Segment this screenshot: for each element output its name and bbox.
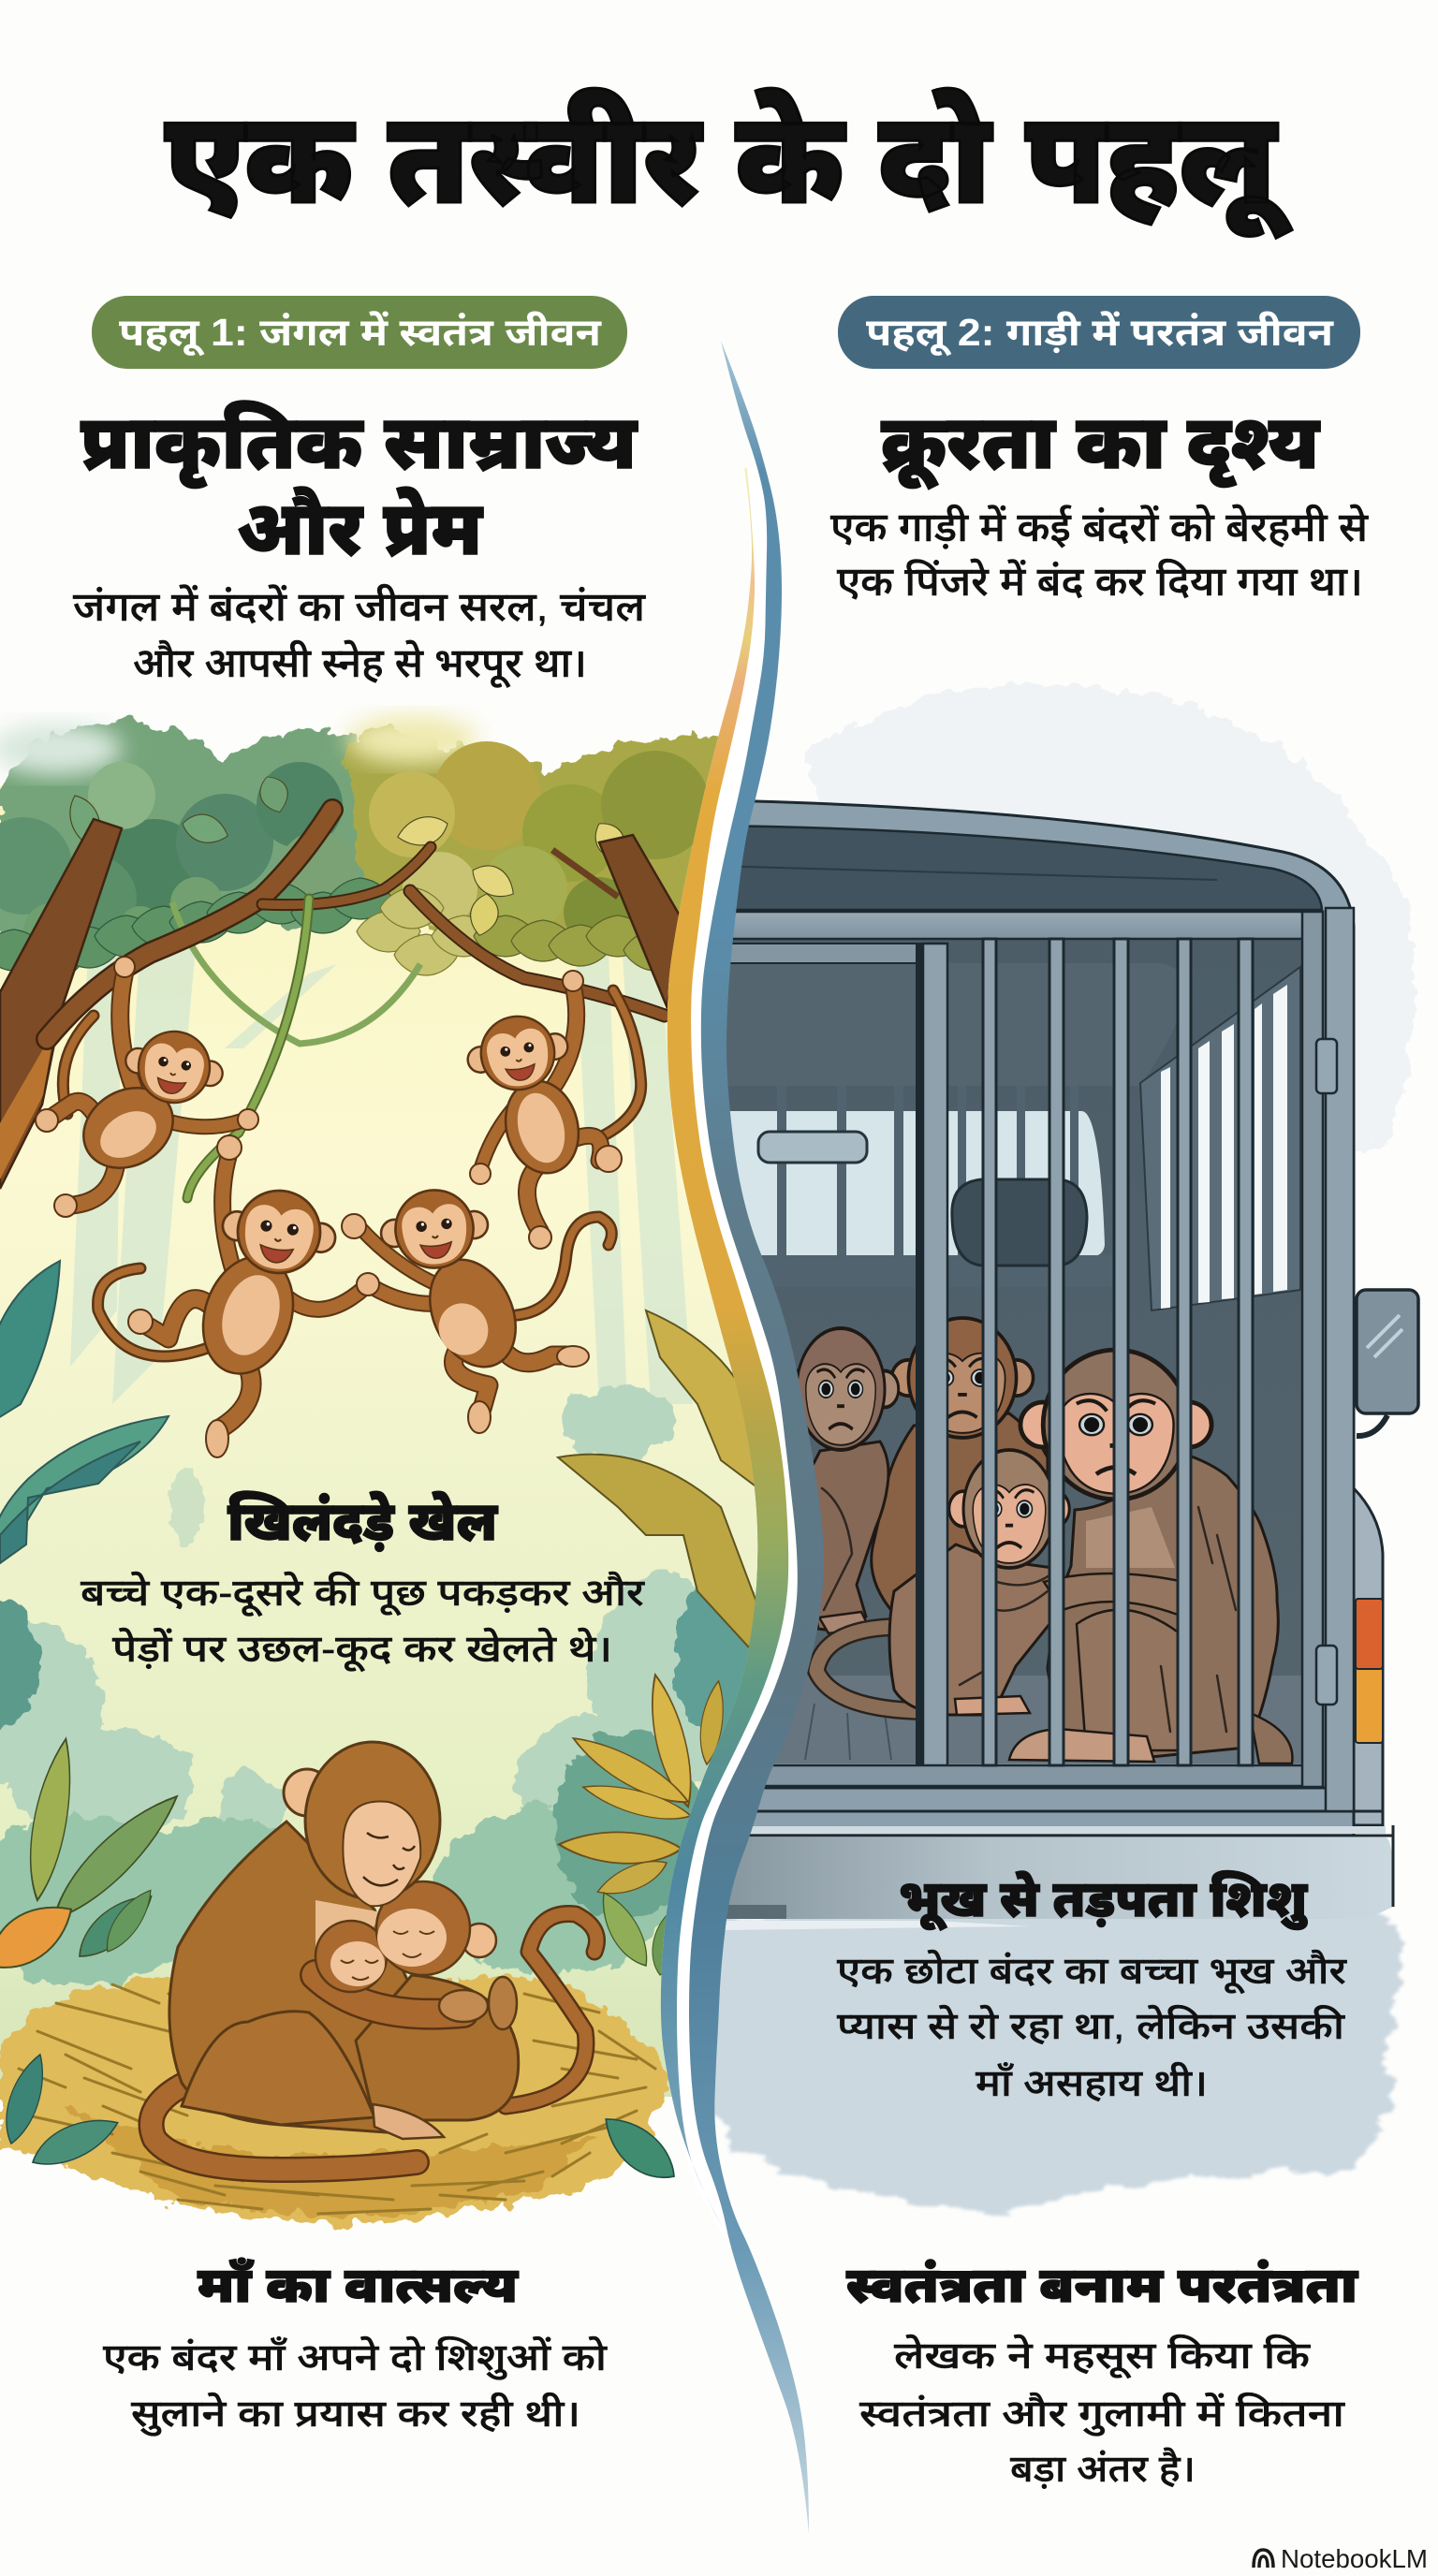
leaves yellow right	[558, 1310, 763, 1647]
soft bushes	[0, 1383, 711, 1829]
jungle sky	[0, 786, 777, 2097]
mother chest	[315, 1900, 382, 1975]
foot	[1009, 1729, 1154, 1762]
mother second hand	[489, 1977, 517, 2029]
section: starving infant	[837, 1869, 1347, 2104]
baby one head	[315, 1921, 387, 1992]
cage interior	[712, 939, 1303, 1764]
monkey D centre right	[342, 1185, 611, 1433]
mother arm fill	[315, 1975, 463, 2014]
monkey far left	[783, 1328, 899, 1630]
left heading: प्राकृतिक साम्राज्य	[81, 401, 638, 489]
canopy olive leaves right	[474, 915, 687, 971]
branch middle	[262, 847, 431, 905]
right intro text	[830, 504, 1369, 605]
truck door frame	[712, 908, 1354, 1811]
door hinge upper	[1316, 1039, 1337, 1093]
wave divider: white gap	[673, 468, 802, 2256]
truck wheel arch side	[1354, 1488, 1383, 1825]
section: freedom vs captivity: लेखक ने महसूस किया कि	[894, 2334, 1312, 2378]
tail light	[1356, 1599, 1383, 1743]
section: mother's love	[103, 2259, 608, 2437]
title: एक तस्वीर के दो पहलू	[165, 87, 1293, 239]
rear-view mirror	[758, 1132, 867, 1163]
left monkey foot	[819, 1612, 869, 1633]
foreground leaf right	[594, 2106, 685, 2191]
section: freedom vs captivity: स्वतंत्रता बनाम परतंत्रता	[846, 2259, 1359, 2313]
monkey B hanging right	[462, 971, 641, 1249]
NotebookLM logo: NotebookLM	[1281, 2544, 1428, 2573]
section: starving infant: माँ असहाय थी।	[976, 2062, 1208, 2104]
white wash covering jungle bottom edge	[0, 2176, 712, 2265]
leaves green lower right	[591, 1886, 682, 1977]
straw nest	[0, 1976, 669, 2226]
truck rail lines	[712, 1788, 1393, 1836]
jungle foliage behind mother	[0, 1573, 768, 1984]
canopy scalloped leaves right	[356, 887, 477, 976]
mother leg	[182, 2012, 374, 2125]
chest	[1086, 1507, 1175, 1568]
side window with stripes	[1140, 967, 1300, 1310]
truck body shell	[712, 801, 1354, 1836]
bumper end line	[1391, 1825, 1395, 1907]
hanging vine fill	[187, 899, 309, 1198]
pill: side 2	[838, 296, 1360, 369]
truck rail highlight	[740, 1826, 1386, 1834]
mother body	[169, 1822, 440, 2134]
vine loop	[172, 902, 420, 1044]
caged monkeys	[783, 1318, 1292, 1764]
section: playful games: बच्चे एक-दूसरे की पूछ पकड़कर और	[81, 1571, 645, 1617]
branch left main fill	[47, 810, 332, 1039]
baby monkey	[889, 1450, 1069, 1715]
cage bars	[983, 939, 1253, 1765]
knee	[1077, 1610, 1189, 1750]
dark teal left bush	[0, 1601, 39, 1732]
mother head	[284, 1742, 440, 1906]
monkey tail fill	[816, 1627, 922, 1711]
pill: side 2: पहलू 2: गाड़ी में परतंत्र जीवन	[866, 311, 1334, 357]
right intro text: एक पिंजरे में बंद कर दिया गया था।	[837, 558, 1363, 605]
section: starving infant: प्यास से रो रहा था, लेकिन उसकी	[837, 2004, 1345, 2047]
left heading	[81, 401, 638, 570]
section: mother's love: माँ का वात्सल्य	[198, 2259, 519, 2313]
branch left main	[47, 810, 332, 1039]
cover left of the wave	[710, 1291, 758, 1762]
section: starving infant: भूख से तड़पता शिशु	[899, 1869, 1308, 1931]
arm	[1044, 1573, 1184, 1615]
cage floor	[712, 1676, 1303, 1764]
truck roof inner	[712, 826, 1322, 910]
right heading: क्रूरता का दृश्य	[881, 401, 1320, 490]
canopy left	[0, 715, 365, 934]
roof crease line	[712, 866, 1217, 880]
hanging vine	[187, 899, 309, 1198]
cab window	[721, 1111, 1105, 1256]
foliage lower left	[0, 1735, 189, 1983]
wave divider: left gold to blue band	[661, 468, 788, 2228]
branch right upper	[552, 850, 618, 897]
baby tail	[506, 1913, 597, 2106]
monkey tail outline	[816, 1627, 922, 1711]
panel: jungle scene (left)	[0, 715, 777, 2226]
wash behind lower text	[683, 1900, 1401, 2213]
canopy highlight leaves	[63, 772, 633, 938]
mother foot	[373, 2104, 444, 2139]
trunk highlight	[0, 1049, 51, 1179]
tree trunk right	[599, 835, 683, 1006]
panel: captivity scene (right)	[683, 684, 1418, 2213]
left intro text: जंगल में बंदरों का जीवन सरल, चंचल	[73, 584, 646, 630]
baby body	[356, 1975, 519, 2120]
seat headrest	[952, 1179, 1087, 1266]
in-cage tail	[1250, 1713, 1292, 1764]
branch right	[410, 891, 665, 1016]
door hinge lower	[1316, 1646, 1337, 1705]
monkey A hanging left	[36, 957, 258, 1217]
foreground leaf left low	[25, 2107, 124, 2175]
window bars	[712, 1086, 1114, 1287]
pill: side 1: पहलू 1: जंगल में स्वतंत्र जीवन	[119, 311, 602, 357]
leaves teal left	[0, 1261, 169, 1563]
canopy scalloped leaves left	[0, 878, 392, 980]
pill: side 1	[92, 296, 627, 369]
wash behind truck	[805, 684, 1415, 1217]
monkey C centre left	[98, 1135, 365, 1457]
mother monkey in cage	[1009, 1350, 1292, 1764]
branch middle fill	[262, 847, 431, 905]
side mirror	[1357, 1290, 1418, 1436]
section: mother's love: एक बंदर माँ अपने दो शिशुओं को	[103, 2335, 608, 2380]
section: playful games: खिलंदड़े खेल	[227, 1491, 498, 1552]
floor planks	[805, 1704, 891, 1760]
section: freedom vs captivity	[846, 2259, 1359, 2490]
section: freedom vs captivity: बड़ा अंतर है।	[1010, 2448, 1196, 2490]
branch right fill	[410, 891, 665, 1016]
pale distant trunks	[70, 927, 693, 1404]
left intro text: और आपसी स्नेह से भरपूर था।	[133, 639, 587, 688]
baby two head	[376, 1881, 496, 1975]
leaves yellow lower right	[558, 1672, 728, 1903]
foreground leaf left	[0, 2050, 52, 2147]
mother hand	[439, 1990, 488, 2022]
right intro text: एक गाड़ी में कई बंदरों को बेरहमी से	[830, 504, 1369, 550]
section: playful games	[81, 1491, 645, 1672]
mother arm	[315, 1975, 463, 2014]
canopy right	[346, 715, 740, 964]
wave divider: right blue band	[689, 341, 824, 2534]
bumper light strip	[726, 1921, 1030, 1930]
left heading: और प्रेम	[237, 486, 484, 570]
left intro text	[73, 584, 646, 688]
baby tail fill	[506, 1913, 597, 2106]
tree trunk left	[0, 819, 122, 1189]
monkey rear middle	[872, 1318, 1048, 1619]
truck bumper	[721, 1837, 1393, 1919]
section: starving infant: एक छोटा बंदर का बच्चा भूख और	[837, 1950, 1347, 1994]
section: mother's love: सुलाने का प्रयास कर रही थी।	[131, 2392, 580, 2437]
mother monkey with babies	[152, 1742, 597, 2170]
section: playful games: पेड़ों पर उछल-कूद कर खेलते थे।	[112, 1627, 612, 1672]
section: freedom vs captivity: स्वतंत्रता और गुलामी में कितना	[859, 2393, 1345, 2437]
bumper shadow	[721, 1905, 786, 1919]
cabin ceiling	[712, 963, 1184, 1086]
